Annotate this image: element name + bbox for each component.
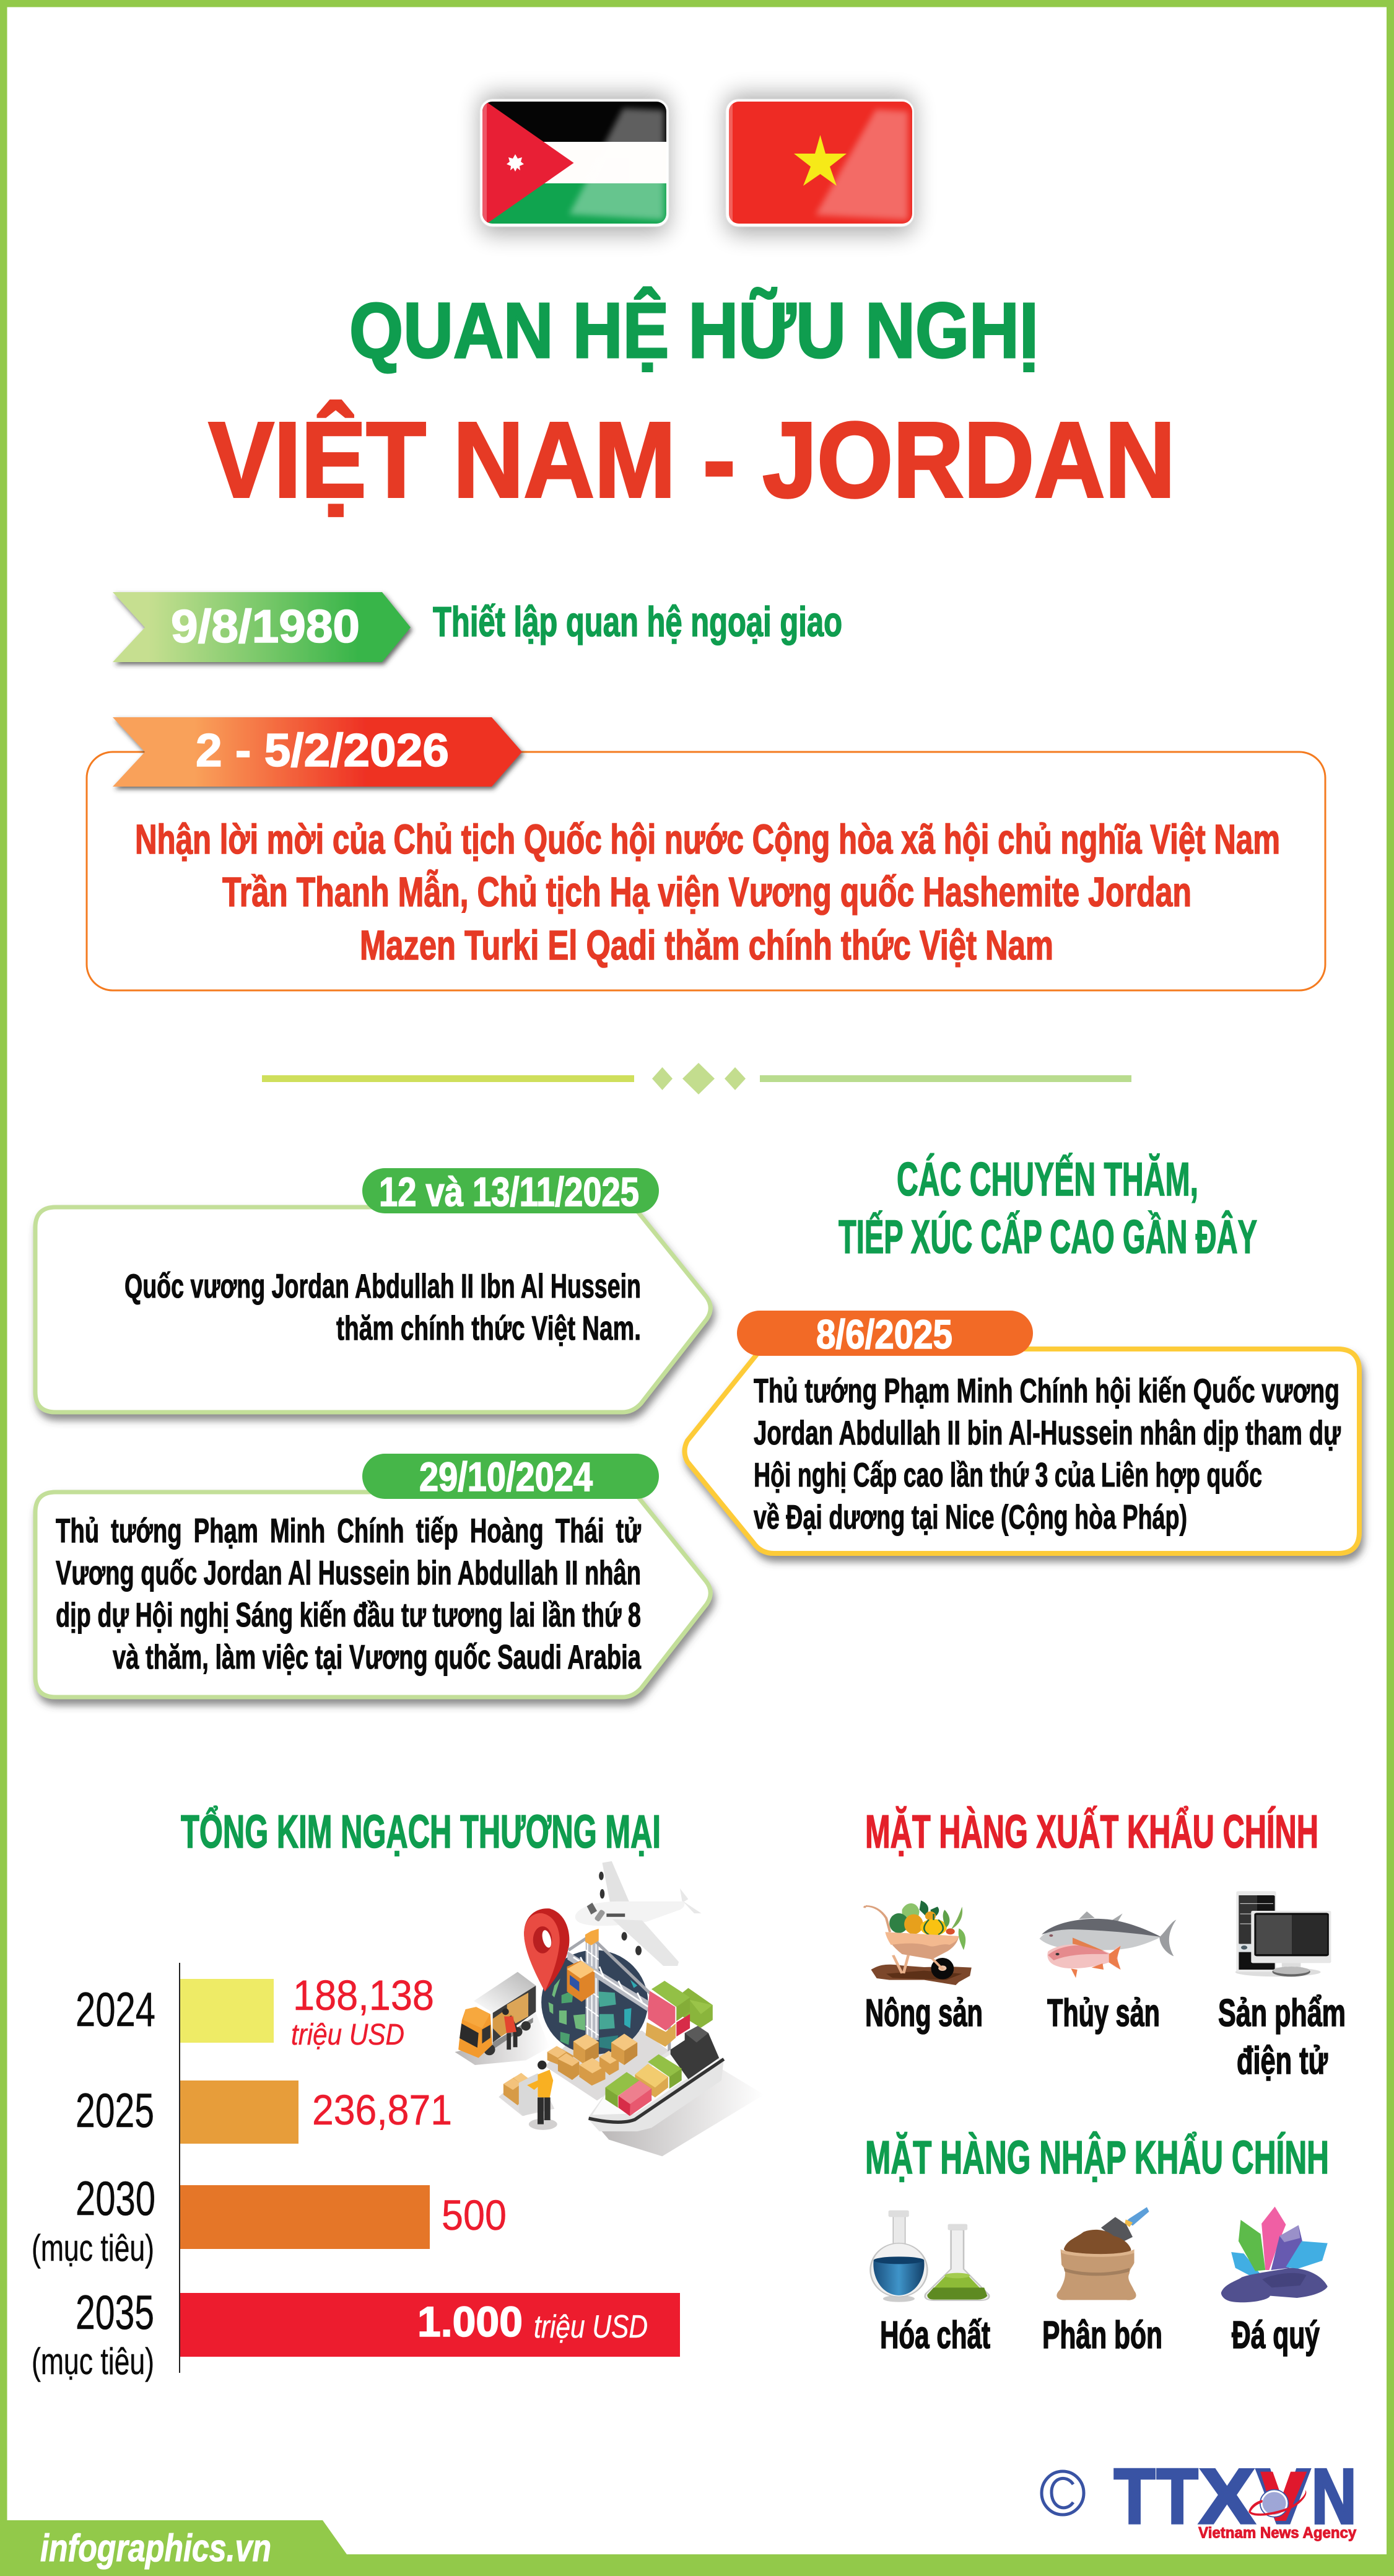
date pill: 29/10/2024 [419, 1454, 593, 1500]
label: điện tử [1237, 2040, 1328, 2082]
plane [575, 1861, 701, 1966]
panel: visit 29/10/2024 [35, 1454, 710, 1697]
visit text [754, 1371, 1341, 1536]
visit description: Mazen Turki El Qadi thăm chính thức Việt Nam [360, 922, 1053, 969]
heading: recent visits [839, 1153, 1257, 1264]
label: Thủy sản [1047, 1992, 1160, 2035]
icon: wheelbarrow [864, 1900, 972, 1985]
date pill: 8/6/2025 [816, 1311, 952, 1357]
bar 2035: 1.000 [417, 2298, 523, 2346]
visit text: Vương quốc Jordan Al Hussein bin Abdullah II nhân [56, 1553, 641, 1592]
logo: TTXVN: N [1312, 2453, 1356, 2539]
item: gems [1221, 2207, 1328, 2357]
icon: fish [1039, 1911, 1176, 1978]
illustration: logistics scene [455, 1861, 764, 2156]
bar 2030: 2030 [76, 2171, 155, 2225]
bar 2025 [76, 2080, 452, 2144]
milestone text 1980: Thiết lập quan hệ ngoại giao [433, 598, 842, 645]
flag: Vietnam [726, 94, 914, 234]
panel: 2026 visit [87, 717, 1325, 990]
panel: visit 8/6/2025 [685, 1311, 1359, 1553]
panel: visit 12 and 13/11/2025 [35, 1168, 710, 1412]
visit text: Thủ tướng Phạm Minh Chính tiếp Hoàng Thái tử [56, 1511, 641, 1550]
bar 2024: triệu USD [291, 2019, 404, 2051]
title line 1: QUAN HỆ HỮU NGHỊ [349, 287, 1039, 374]
heading: recent visits: CÁC CHUYẾN THĂM, [897, 1153, 1198, 1206]
bar 2035: (mục tiêu) [32, 2341, 154, 2382]
bar 2024: 188,138 [293, 1971, 434, 2019]
worker with trolley [503, 2061, 553, 2124]
bar 2030: (mục tiêu) [32, 2227, 154, 2269]
logo: TTXVN: T [1157, 2453, 1198, 2539]
visit text [56, 1511, 641, 1676]
cargo boxes [547, 2033, 637, 2085]
location pin [524, 1908, 569, 1991]
visit description [135, 816, 1280, 969]
logo: TTXVN: T [1114, 2453, 1155, 2539]
item: agricultural products [864, 1900, 983, 2035]
visit text [124, 1267, 641, 1347]
flags [480, 94, 914, 234]
chart axis [179, 1963, 180, 2373]
item: electronics [1218, 1891, 1346, 2082]
visit text: dịp dự Hội nghị Sáng kiến đầu tư tương lai lần thứ 8 [56, 1596, 641, 1634]
bar 2030 [32, 2171, 507, 2269]
logo: TTXVN: V [1257, 2453, 1310, 2539]
icon: computer [1235, 1891, 1331, 1976]
panel outline [87, 752, 1325, 990]
bar 2025: 2025 [76, 2083, 154, 2137]
bar 2035: 2035 [76, 2285, 154, 2339]
label: Đá quý [1232, 2314, 1320, 2357]
footer band [0, 2520, 1394, 2576]
date ribbon 2 - 5/2/2026 [113, 717, 522, 787]
logo: TTXVN: Vietnam News Agency [1198, 2525, 1356, 2542]
footer site name: infographics.vn [40, 2527, 271, 2570]
item: chemicals [871, 2211, 990, 2357]
label: Nông sản [865, 1992, 983, 2035]
bar 2024: 2024 [76, 1982, 155, 2037]
icon: soil sack with shovel [1056, 2207, 1149, 2300]
logo: TTXVN: X [1200, 2453, 1255, 2539]
date pill [362, 1454, 659, 1500]
bar chart: trade value [32, 1963, 680, 2382]
visit text: về Đại dương tại Nice (Cộng hòa Pháp) [754, 1498, 1187, 1536]
cargo ship [588, 2026, 724, 2131]
export items [864, 1891, 1346, 2082]
visit text: thăm chính thức Việt Nam. [336, 1309, 641, 1347]
bar 2030: 500 [442, 2191, 507, 2239]
icon: flasks [871, 2211, 989, 2302]
copyright symbol [1042, 2471, 1084, 2515]
bar 2035 [32, 2285, 680, 2382]
heading: total trade: TỔNG KIM NGẠCH THƯƠNG MẠI [181, 1805, 661, 1858]
visit text: Quốc vương Jordan Abdullah II Ibn Al Hussein [124, 1267, 641, 1305]
import items [871, 2207, 1328, 2357]
truck [458, 1972, 536, 2058]
label: Hóa chất [880, 2314, 990, 2357]
bar 2035: triệu USD [534, 2309, 648, 2345]
label [1218, 1992, 1346, 2082]
date pill: 12 và 13/11/2025 [379, 1169, 639, 1215]
bar 2024 [76, 1971, 434, 2051]
crane [567, 1929, 669, 2065]
item: seafood [1039, 1911, 1176, 2035]
visit text: và thăm, làm việc tại Vương quốc Saudi Arabia [113, 1638, 641, 1676]
flag: Jordan [480, 94, 669, 234]
section divider [262, 1063, 1131, 1094]
date ribbon 2 - 5/2/2026: 2 - 5/2/2026 [196, 724, 449, 776]
globe [541, 1950, 648, 2054]
stacked containers [646, 1981, 713, 2047]
item: fertilizer [1042, 2207, 1162, 2357]
bar 2025: 236,871 [312, 2086, 452, 2134]
icon: gemstones [1221, 2207, 1328, 2302]
logo: TTXVN [1114, 2453, 1356, 2542]
title line 2: VIỆT NAM - JORDAN [209, 399, 1175, 520]
date pill [737, 1311, 1033, 1357]
date ribbon 9/8/1980: 9/8/1980 [171, 600, 360, 652]
date ribbon 9/8/1980 [113, 592, 411, 662]
label: Phân bón [1042, 2314, 1162, 2357]
